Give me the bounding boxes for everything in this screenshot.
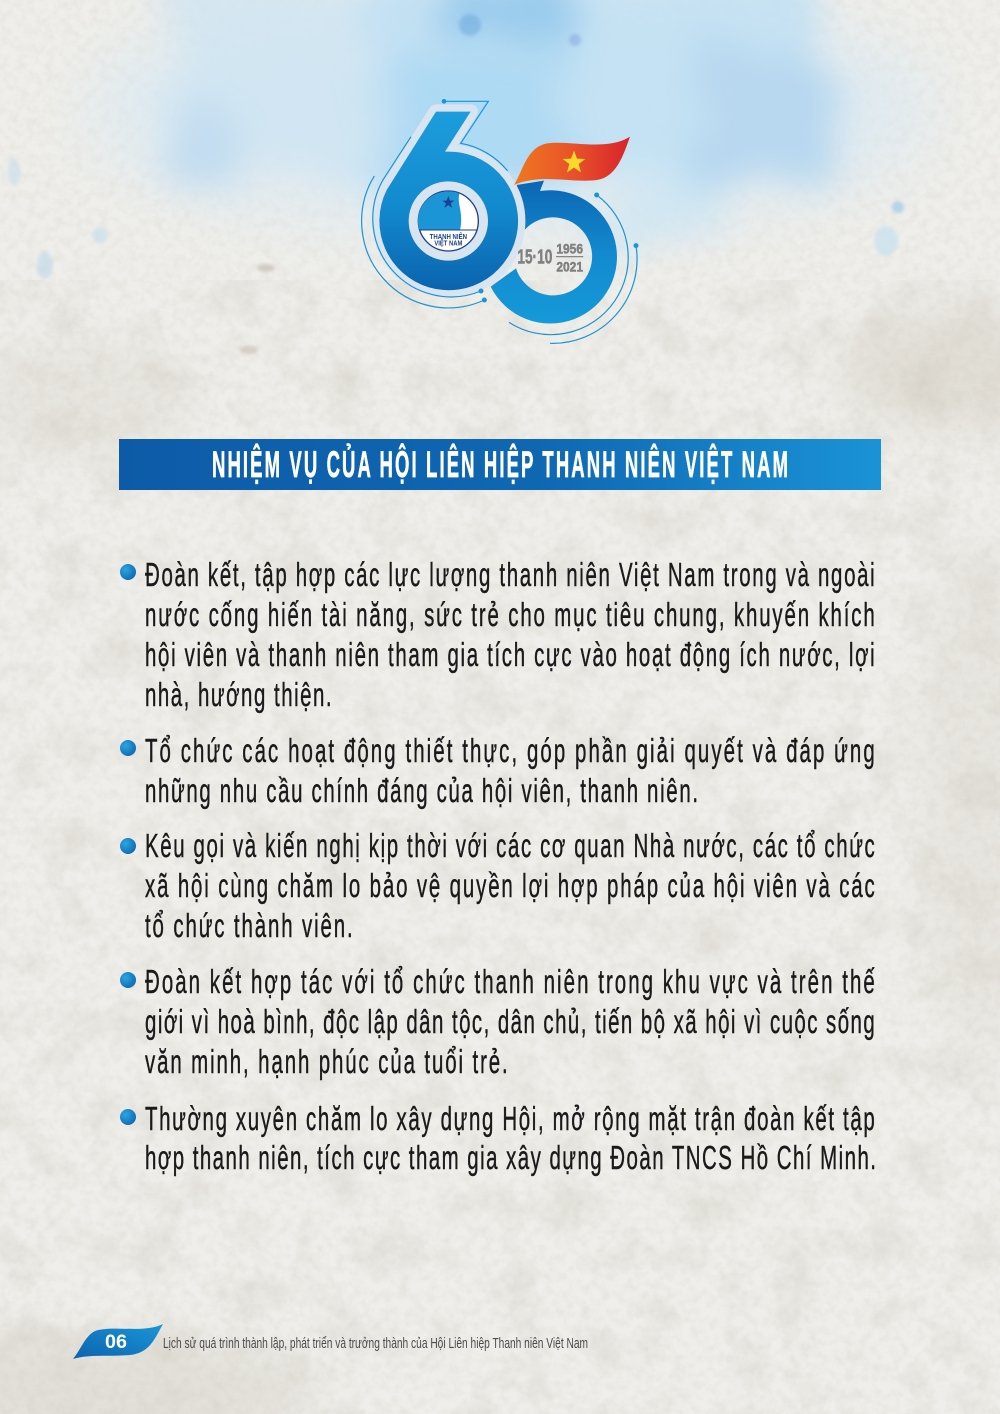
- task 3: tổ chức thành viên.: [145, 907, 353, 944]
- task 2: những nhu cầu chính đáng của hội viên, thanh niên.: [145, 772, 698, 809]
- title banner: [119, 439, 881, 490]
- orbit lines: [362, 99, 638, 343]
- footer text: Lịch sử quá trình thành lập, phát triển và trưởng thành của Hội Liên hiệp Thanh niên Việt Nam: [163, 1336, 588, 1352]
- task 5: Thường xuyên chăm lo xây dựng Hội, mở rộng mặt trận đoàn kết tập: [145, 1100, 875, 1137]
- date text: 2021: [556, 259, 583, 274]
- digit 5: [491, 181, 617, 324]
- task 2: Tổ chức các hoạt động thiết thực, góp phần giải quyết và đáp ứng: [145, 732, 875, 769]
- task 1: [120, 556, 875, 713]
- youth union emblem: VIỆT NAM: [434, 239, 462, 248]
- task 3: [120, 827, 875, 944]
- emblem text: THANH NIÊN: [430, 232, 467, 241]
- task 3: Kêu gọi và kiến nghị kịp thời với các cơ quan Nhà nước, các tổ chức: [145, 827, 875, 864]
- page number: 06: [105, 1331, 127, 1353]
- task 4: văn minh, hạnh phúc của tuổi trẻ.: [145, 1043, 508, 1080]
- task 2: [120, 732, 875, 809]
- watercolor wash: [8, 0, 930, 279]
- date text: 1956: [556, 242, 583, 257]
- date text: 15·10: [517, 247, 552, 269]
- youth union emblem: [418, 191, 478, 251]
- task 1: nước cống hiến tài năng, sức trẻ cho mục tiêu chung, khuyến khích: [145, 596, 875, 633]
- digit 6 with halo: [379, 112, 518, 290]
- page number tab: [73, 1324, 163, 1359]
- task 4: Đoàn kết hợp tác với tổ chức thanh niên trong khu vực và trên thế: [145, 963, 875, 1000]
- task 1: Đoàn kết, tập hợp các lực lượng thanh niên Việt Nam trong và ngoài: [145, 556, 875, 593]
- logo: 65th anniversary: [362, 99, 638, 343]
- title text: NHIỆM VỤ CỦA HỘI LIÊN HIỆP THANH NIÊN VIỆT NAM: [212, 443, 788, 486]
- task 4: [120, 963, 875, 1080]
- task list: [120, 556, 876, 1176]
- task 1: nhà, hướng thiện.: [145, 676, 332, 713]
- task 4: giới vì hoà bình, độc lập dân tộc, dân chủ, tiến bộ xã hội vì cuộc sống: [145, 1003, 875, 1040]
- date text: [517, 242, 583, 274]
- task 3: xã hội cùng chăm lo bảo vệ quyền lợi hợp pháp của hội viên và các: [145, 867, 875, 904]
- task 5: [120, 1100, 876, 1176]
- flag: [514, 137, 630, 185]
- task 1: hội viên và thanh niên tham gia tích cực vào hoạt động ích nước, lợi: [145, 636, 875, 673]
- task 5: hợp thanh niên, tích cực tham gia xây dựng Đoàn TNCS Hồ Chí Minh.: [145, 1139, 876, 1176]
